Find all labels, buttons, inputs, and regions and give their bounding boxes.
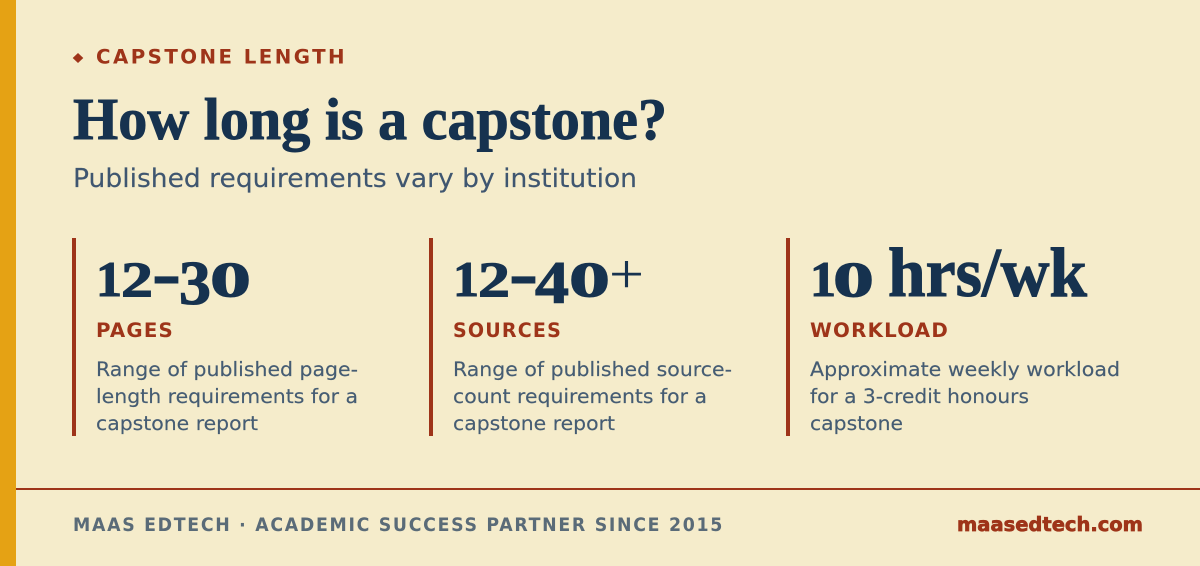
stat description: sources: capstone report — [453, 412, 615, 435]
stat description: pages: length requirements for a — [96, 385, 358, 408]
stat number: 12-30: - — [153, 241, 180, 307]
stat number: 12-30 — [96, 241, 251, 318]
stat number: 12-30: 1 — [96, 251, 122, 307]
stat label: pages: PAGES — [96, 319, 174, 342]
eyebrow: section label — [73, 46, 347, 68]
subtitle: Published requirements vary by institution — [73, 164, 637, 194]
panel rule — [429, 238, 433, 436]
stat description: pages — [96, 358, 358, 435]
panel: pages — [72, 238, 358, 436]
stat description: workload: Approximate weekly workload — [810, 358, 1120, 381]
panel rule — [72, 238, 76, 436]
stat number: 12-40+: 4 — [535, 250, 569, 316]
stat number: 12-40+: - — [510, 241, 537, 307]
panel: workload — [786, 235, 1120, 436]
stat description: sources: count requirements for a — [453, 385, 707, 408]
stat number: 12-40+: 2 — [478, 251, 510, 307]
accent bar: left edge — [0, 0, 16, 566]
stat description: sources: Range of published source- — [453, 358, 732, 381]
stat description: workload: capstone — [810, 412, 903, 435]
stat number: 12-40+: 0 — [569, 251, 610, 307]
stat label: sources: SOURCES — [453, 319, 562, 342]
footer: organisation line: MAAS EDTECH · ACADEMIC SUCCESS PARTNER SINCE 2015 — [73, 515, 724, 536]
stat description: workload: for a 3-credit honours — [810, 385, 1029, 408]
footer: website: maasedtech.com — [957, 513, 1143, 536]
title: How long is a capstone? — [73, 86, 667, 152]
footer divider — [16, 488, 1200, 490]
stat number: 12-40+: 1 — [453, 251, 479, 307]
panel: sources — [429, 238, 732, 436]
stat description: workload — [810, 358, 1120, 435]
panel rule — [786, 238, 790, 436]
icon: diamond — [73, 53, 83, 63]
stat description: sources — [453, 358, 732, 435]
stat description: pages: capstone report — [96, 412, 258, 435]
stat description: pages: Range of published page- — [96, 358, 358, 381]
stat number: 12-40+: + — [609, 244, 644, 306]
stat number: 10 hrs/wk: hrs/wk — [888, 235, 1087, 312]
stat number: 12-30: 2 — [121, 251, 153, 307]
stat label: workload: WORKLOAD — [810, 319, 949, 342]
stat number: 12-40+ — [453, 241, 644, 316]
eyebrow text: CAPSTONE LENGTH — [96, 46, 347, 68]
stat number: 12-30: 3 — [179, 250, 211, 318]
stat number: 10 hrs/wk: 0 — [833, 251, 874, 307]
stat number: 12-30: 0 — [210, 251, 251, 307]
stat number: 10 hrs/wk: 1 — [810, 251, 836, 307]
